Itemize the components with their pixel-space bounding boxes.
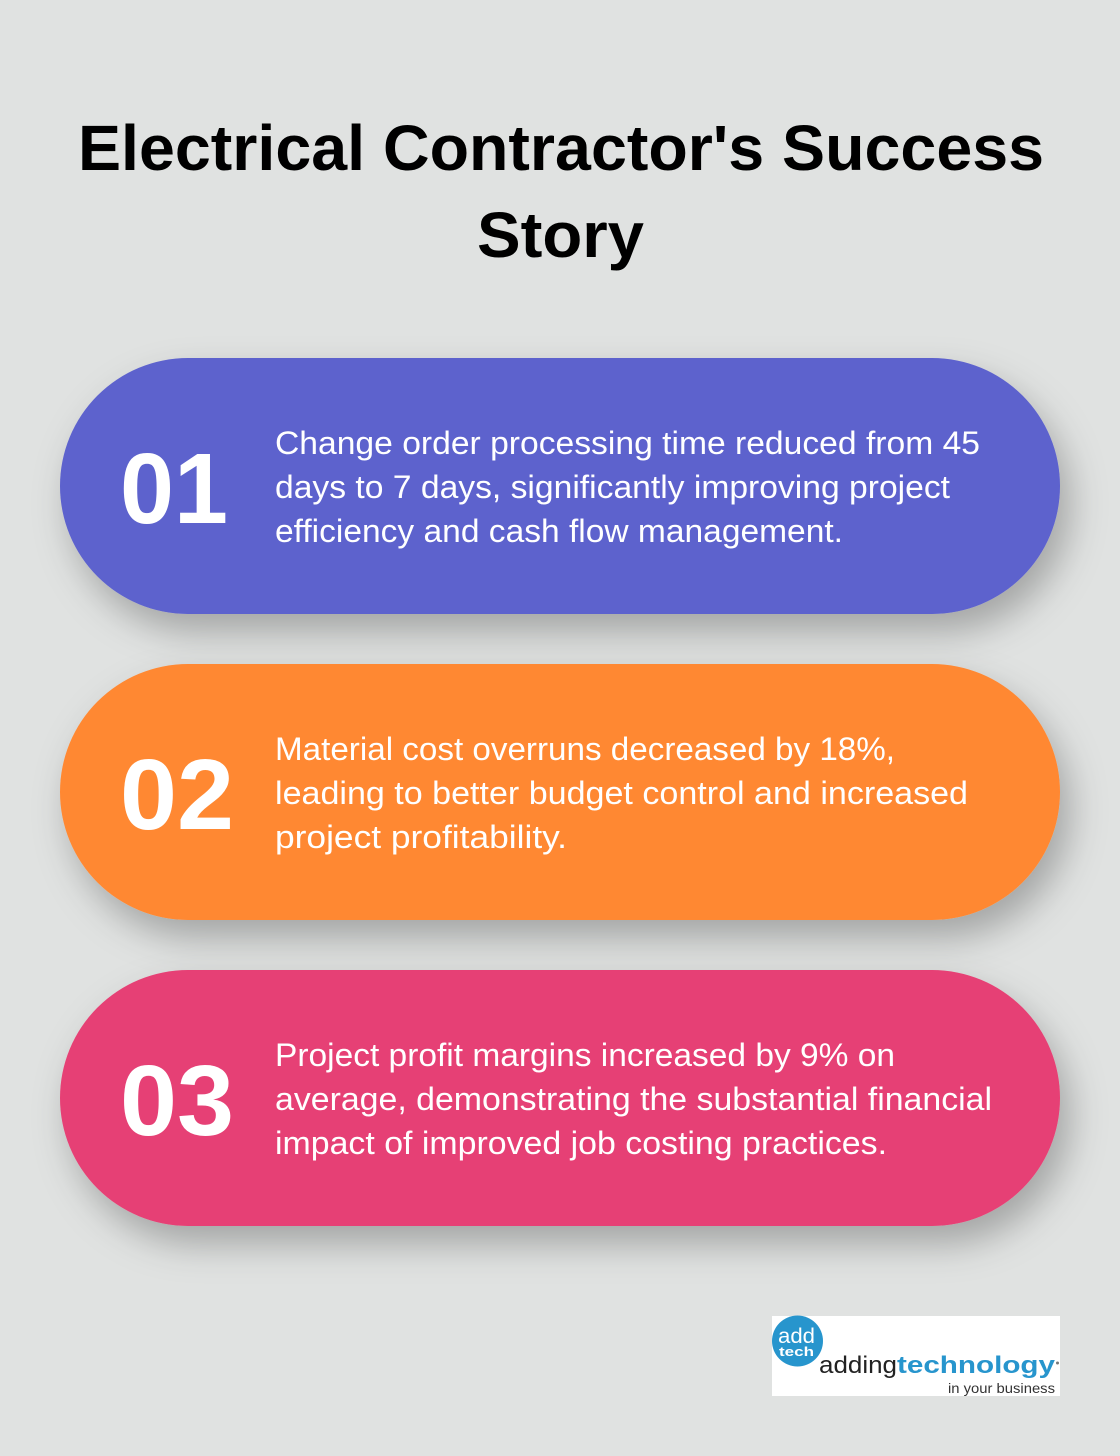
panel: step 01 bbox=[60, 358, 1060, 614]
pill: step 03 background bbox=[60, 970, 1060, 1226]
title: Electrical Contractor's Success bbox=[78, 112, 1044, 184]
logo icon: add tech circle: tech bbox=[779, 1344, 814, 1359]
title bbox=[78, 112, 1044, 271]
logo tagline: in your business bbox=[948, 1381, 1055, 1396]
number 02: 02 bbox=[120, 739, 234, 851]
text block: step 02: project profitability. bbox=[275, 819, 567, 855]
text block: step 03: impact of improved job costing practices. bbox=[275, 1125, 887, 1161]
logo icon: add tech circle bbox=[772, 1316, 823, 1366]
panel: step 03 bbox=[60, 970, 1060, 1226]
logo icon: add tech circle: add bbox=[778, 1325, 815, 1348]
text block: step 02 bbox=[275, 731, 968, 855]
pill: step 01 background bbox=[60, 358, 1060, 614]
text block: step 03: Project profit margins increased by 9% on bbox=[275, 1037, 895, 1073]
logo wordmark bbox=[819, 1352, 1059, 1379]
text block: step 01: Change order processing time reduced from 45 bbox=[275, 425, 980, 461]
logo wordmark: adding bbox=[819, 1352, 897, 1379]
number 01: 01 bbox=[120, 433, 228, 545]
text block: step 01: days to 7 days, significantly improving project bbox=[275, 469, 950, 505]
number 03: 03 bbox=[120, 1045, 234, 1157]
text block: step 01: efficiency and cash flow management. bbox=[275, 513, 843, 549]
text block: step 02: leading to better budget control and increased bbox=[275, 775, 968, 811]
panel: step 02 bbox=[60, 664, 1060, 920]
logo: addingtechnology bbox=[772, 1316, 1060, 1396]
logo background bbox=[772, 1316, 1060, 1396]
text block: step 01 bbox=[275, 425, 980, 549]
pill: step 02 background bbox=[60, 664, 1060, 920]
text block: step 02: Material cost overruns decreased by 18%, bbox=[275, 731, 895, 767]
logo wordmark: technology bbox=[897, 1352, 1056, 1379]
text block: step 03 bbox=[275, 1037, 992, 1161]
text block: step 03: average, demonstrating the substantial financial bbox=[275, 1081, 992, 1117]
title: Story bbox=[477, 199, 644, 271]
